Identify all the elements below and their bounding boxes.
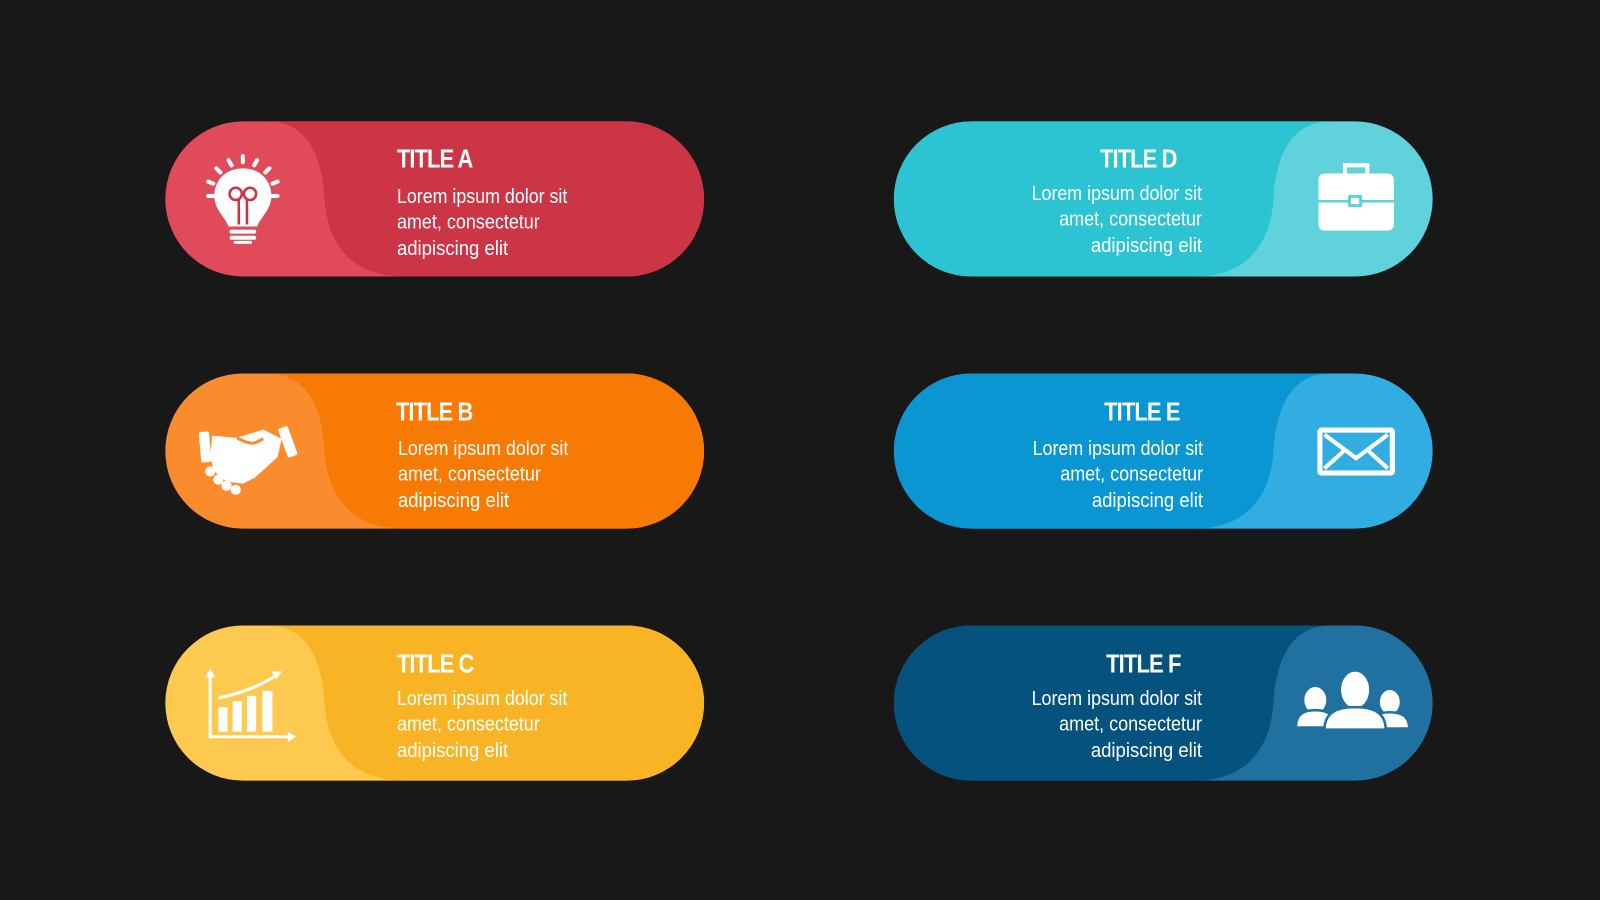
text: title A [397, 145, 568, 260]
text: title C: amet, consectetur [397, 714, 540, 736]
text: title A: TITLE A [397, 145, 473, 173]
text: title D: amet, consectetur [1059, 209, 1202, 231]
text: title D: TITLE D [1100, 145, 1177, 173]
icon: briefcase [1318, 165, 1394, 231]
text: title B [396, 398, 569, 512]
text: title F: Lorem ipsum dolor sit [1032, 688, 1202, 710]
text: title F: adipiscing elit [1091, 740, 1202, 762]
text: title C [397, 650, 568, 762]
text: title D [1032, 145, 1202, 257]
text: title E: TITLE E [1104, 398, 1180, 426]
text: title E: adipiscing elit [1092, 490, 1203, 512]
text: title E: amet, consectetur [1060, 464, 1203, 486]
text: title F [1032, 650, 1202, 762]
panel: title F [894, 626, 1433, 781]
panel: title D [894, 121, 1433, 277]
text: title B: adipiscing elit [398, 490, 510, 512]
text: title D: Lorem ipsum dolor sit [1032, 183, 1202, 205]
text: title C: adipiscing elit [397, 740, 509, 762]
panel: title C [165, 626, 704, 781]
text: title A: Lorem ipsum dolor sit [397, 186, 568, 208]
icon: people [1296, 670, 1409, 730]
icon: envelope [1317, 428, 1395, 476]
icon: handshake [199, 426, 298, 495]
panel: title B [165, 373, 704, 529]
text: title F: TITLE F [1106, 650, 1181, 678]
text: title E [1033, 398, 1203, 512]
text: title D: adipiscing elit [1091, 235, 1202, 257]
text: title B: TITLE B [396, 398, 473, 426]
text: title F: amet, consectetur [1059, 714, 1202, 736]
panel: title E [894, 373, 1433, 529]
text: title E: Lorem ipsum dolor sit [1033, 438, 1203, 460]
icon: bar chart [205, 668, 296, 742]
text: title B: Lorem ipsum dolor sit [398, 438, 569, 460]
text: title B: amet, consectetur [398, 464, 541, 486]
text: title C: TITLE C [397, 650, 474, 678]
text: title C: Lorem ipsum dolor sit [397, 688, 568, 710]
icon: light bulb [208, 156, 278, 244]
text: title A: adipiscing elit [397, 238, 509, 260]
text: title A: amet, consectetur [397, 212, 540, 234]
panel: title A [165, 121, 704, 277]
